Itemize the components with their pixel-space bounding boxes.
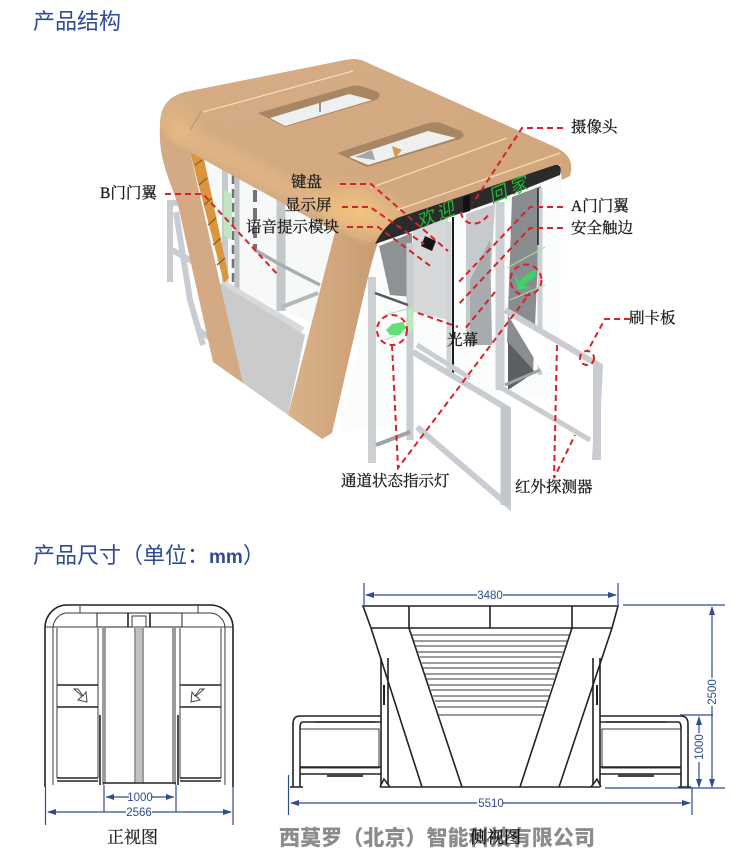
dimension 3480 bbox=[364, 583, 618, 607]
gold canopy structure bbox=[146, 59, 571, 439]
callout labels bbox=[100, 118, 676, 496]
LED sign strip bbox=[375, 165, 561, 244]
gate vertical posts bbox=[372, 188, 540, 463]
corner highlight bbox=[322, 184, 403, 240]
front fold line bbox=[190, 111, 202, 130]
grey side panel bbox=[220, 283, 305, 415]
LED text: 欢迎 bbox=[417, 192, 459, 234]
seams bbox=[203, 71, 560, 210]
side window glazing bbox=[200, 155, 335, 330]
label: safety edge: 安全触边 bbox=[571, 219, 633, 237]
label: display: 显示屏 bbox=[285, 196, 332, 214]
orange inner strip bbox=[190, 152, 229, 283]
B side wing frame bbox=[170, 203, 232, 352]
front view drawing bbox=[45, 605, 233, 825]
dimension 3480: 3480 bbox=[477, 590, 503, 602]
dimension 1000: 1000 bbox=[694, 734, 706, 760]
dimension 5510 bbox=[288, 775, 692, 815]
left corner highlight bbox=[164, 114, 186, 134]
dimension 1000 bbox=[680, 715, 713, 788]
dimension 2500 bbox=[605, 605, 725, 788]
label: card reader: 刷卡板 bbox=[629, 309, 676, 327]
label: keyboard: 键盘 bbox=[291, 173, 322, 191]
canopy front edge highlight bbox=[183, 135, 323, 215]
skylight openings bbox=[258, 86, 464, 167]
dimension 2500: 2500 bbox=[707, 679, 719, 705]
left leg bbox=[160, 110, 243, 383]
icon: keypad display bbox=[421, 236, 436, 251]
A side wing: left door bbox=[413, 345, 508, 505]
label: channel status light: 通道状态指示灯 bbox=[341, 472, 450, 490]
A side wing: right door bbox=[500, 310, 600, 460]
label: infrared detector: 红外探测器 bbox=[515, 478, 593, 496]
LED sign strip: 回家 bbox=[489, 167, 533, 209]
canopy bbox=[363, 606, 618, 787]
front view outline bbox=[45, 605, 233, 787]
right green direction light bbox=[507, 247, 545, 300]
icon: camera bbox=[463, 195, 470, 213]
label: voice module: 语音提示模块 bbox=[246, 217, 340, 236]
dimension 5510: 5510 bbox=[478, 798, 504, 810]
caption: front view: 正视图 bbox=[107, 828, 158, 847]
dimension 1000 bbox=[104, 785, 176, 812]
product 3D illustration bbox=[146, 59, 630, 505]
canopy top surface bbox=[160, 59, 571, 244]
slats bbox=[412, 635, 569, 715]
dashed leader lines bbox=[165, 128, 630, 478]
heading: product structure: 产品结构 bbox=[33, 9, 121, 34]
caption: side view: 侧视图 bbox=[470, 828, 521, 847]
label: camera: 摄像头 bbox=[571, 118, 618, 136]
side view drawing bbox=[288, 583, 725, 815]
front leg bbox=[288, 232, 378, 439]
dimension 1000: 1000 bbox=[127, 792, 153, 804]
dashed callout circles bbox=[377, 212, 594, 365]
left wing bbox=[290, 658, 390, 787]
label: A wing: A门门翼 bbox=[571, 197, 629, 215]
right wing bbox=[591, 658, 691, 787]
dimension 2566: 2566 bbox=[126, 807, 152, 819]
dimension 2566 bbox=[46, 787, 233, 825]
company watermark: 西莫罗（北京）智能科技有限公司 bbox=[279, 826, 595, 850]
heading: product dimensions: 产品尺寸（单位：mm） bbox=[33, 543, 265, 568]
front opening interior bbox=[340, 172, 562, 432]
label: B wing: B门门翼 bbox=[100, 184, 157, 202]
label: light curtain: 光幕 bbox=[447, 331, 478, 349]
left green direction light bbox=[385, 308, 413, 340]
